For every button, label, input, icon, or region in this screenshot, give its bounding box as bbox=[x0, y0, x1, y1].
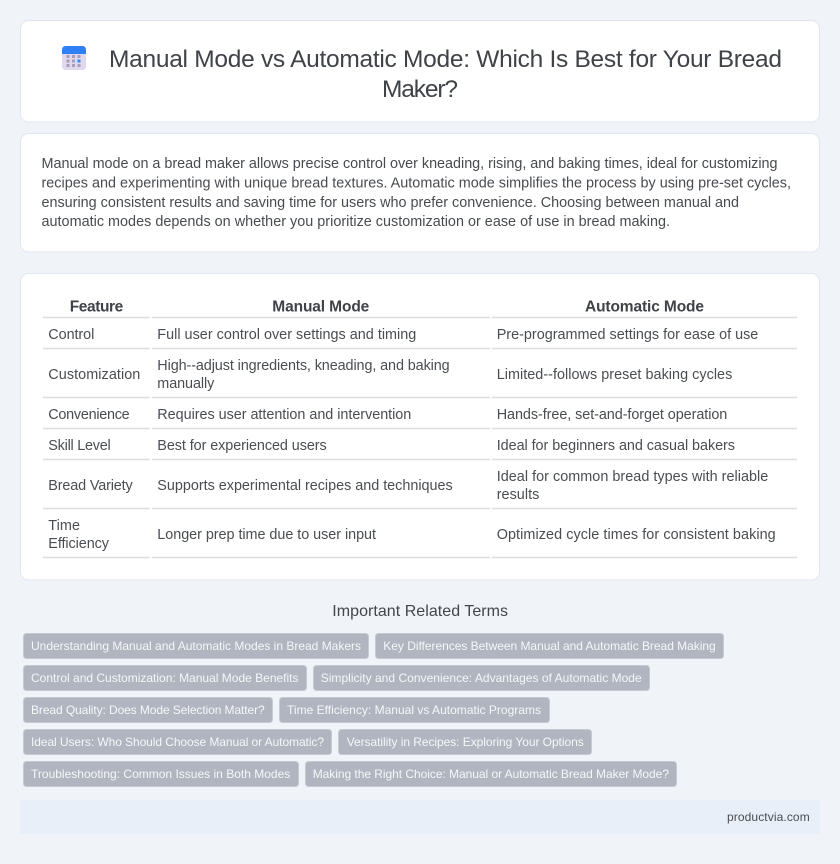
related terms tags bbox=[24, 634, 724, 786]
table header row bbox=[43, 299, 797, 318]
table row: bread variety: Bread Variety bbox=[48, 478, 133, 494]
table row: customization: Customization bbox=[48, 367, 140, 383]
intro text block: automatic modes depends on whether you prioritize customization or ease of use in bread making. bbox=[42, 214, 670, 230]
intro text block: ensuring consistent results and saving time for users who prefer convenience. Choosing between manual and bbox=[42, 195, 739, 211]
intro text block: recipes and experimenting with unique bread textures. Automatic mode simplifies the process by using pre-set cycles, bbox=[42, 176, 791, 192]
title: Manual Mode vs Automatic Mode: Which Is Best for Your Bread bbox=[109, 46, 782, 73]
tag: Troubleshooting: Common Issues in Both Modes bbox=[31, 767, 290, 781]
tag bbox=[280, 698, 550, 722]
icon: calendar bbox=[62, 46, 86, 70]
table header row: Manual Mode bbox=[272, 299, 370, 316]
table row: customization bbox=[43, 358, 797, 398]
table row: skill level: Skill Level bbox=[48, 438, 111, 454]
tag: Control and Customization: Manual Mode Benefits bbox=[31, 671, 298, 685]
table row: skill level: Ideal for beginners and casual bakers bbox=[497, 438, 735, 454]
table row: control: Pre-programmed settings for ease of use bbox=[497, 327, 758, 343]
table row: control: Full user control over settings and timing bbox=[157, 327, 416, 343]
table row: customization: Limited--follows preset baking cycles bbox=[497, 367, 732, 383]
footer bar bbox=[20, 800, 820, 834]
table row: time efficiency: Optimized cycle times for consistent baking bbox=[497, 527, 776, 543]
intro text block: Manual mode on a bread maker allows precise control over kneading, rising, and baking times, ideal for customizing bbox=[42, 156, 778, 172]
tag bbox=[376, 634, 724, 658]
table row: bread variety: Ideal for common bread types with reliable bbox=[497, 469, 768, 485]
tag bbox=[24, 698, 272, 722]
table row: convenience: Requires user attention and intervention bbox=[157, 407, 411, 423]
tag: Key Differences Between Manual and Automatic Bread Making bbox=[383, 639, 716, 653]
tag bbox=[314, 666, 650, 690]
table row: bread variety: results bbox=[497, 487, 539, 503]
tag bbox=[24, 634, 368, 658]
tag bbox=[338, 730, 592, 754]
tag bbox=[306, 762, 676, 786]
table row: convenience: Hands-free, set-and-forget operation bbox=[497, 407, 727, 423]
tag: Time Efficiency: Manual vs Automatic Programs bbox=[287, 703, 541, 717]
table row: time efficiency bbox=[43, 518, 797, 558]
table row: time efficiency: Longer prep time due to user input bbox=[157, 527, 376, 543]
table row: skill level: Best for experienced users bbox=[157, 438, 327, 454]
tag: Bread Quality: Does Mode Selection Matter? bbox=[31, 703, 265, 717]
table header row: Feature bbox=[70, 299, 124, 316]
table header row: Automatic Mode bbox=[585, 299, 704, 316]
table row: customization: manually bbox=[157, 376, 215, 392]
table row: bread variety bbox=[43, 469, 797, 508]
tag bbox=[24, 666, 306, 690]
title: Maker? bbox=[382, 76, 458, 103]
table row: time efficiency: Efficiency bbox=[48, 536, 110, 552]
table row: control: Control bbox=[48, 327, 94, 343]
table row: convenience: Convenience bbox=[48, 407, 130, 423]
panel: introduction bbox=[20, 134, 820, 252]
heading: important related terms: Important Related Terms bbox=[332, 603, 508, 620]
tag: Making the Right Choice: Manual or Automatic Bread Maker Mode? bbox=[313, 767, 669, 781]
table row: control bbox=[43, 327, 797, 348]
intro text block bbox=[42, 156, 791, 230]
title bbox=[109, 46, 782, 103]
tag bbox=[24, 762, 298, 786]
table row: time efficiency: Time bbox=[48, 518, 80, 534]
tag: Simplicity and Convenience: Advantages of Automatic Mode bbox=[321, 671, 642, 685]
panel: header bbox=[20, 20, 820, 122]
table row: customization: High--adjust ingredients, kneading, and baking bbox=[157, 358, 450, 374]
tag: Ideal Users: Who Should Choose Manual or Automatic? bbox=[31, 735, 324, 749]
table row: bread variety: Supports experimental recipes and techniques bbox=[157, 478, 453, 494]
panel: comparison table bbox=[20, 274, 820, 580]
table row: convenience bbox=[43, 407, 797, 428]
tag: Versatility in Recipes: Exploring Your Options bbox=[347, 735, 584, 749]
table row: skill level bbox=[43, 438, 797, 460]
tag: Understanding Manual and Automatic Modes in Bread Makers bbox=[31, 639, 361, 653]
footer bar: productvia.com bbox=[727, 810, 810, 824]
tag bbox=[24, 730, 332, 754]
